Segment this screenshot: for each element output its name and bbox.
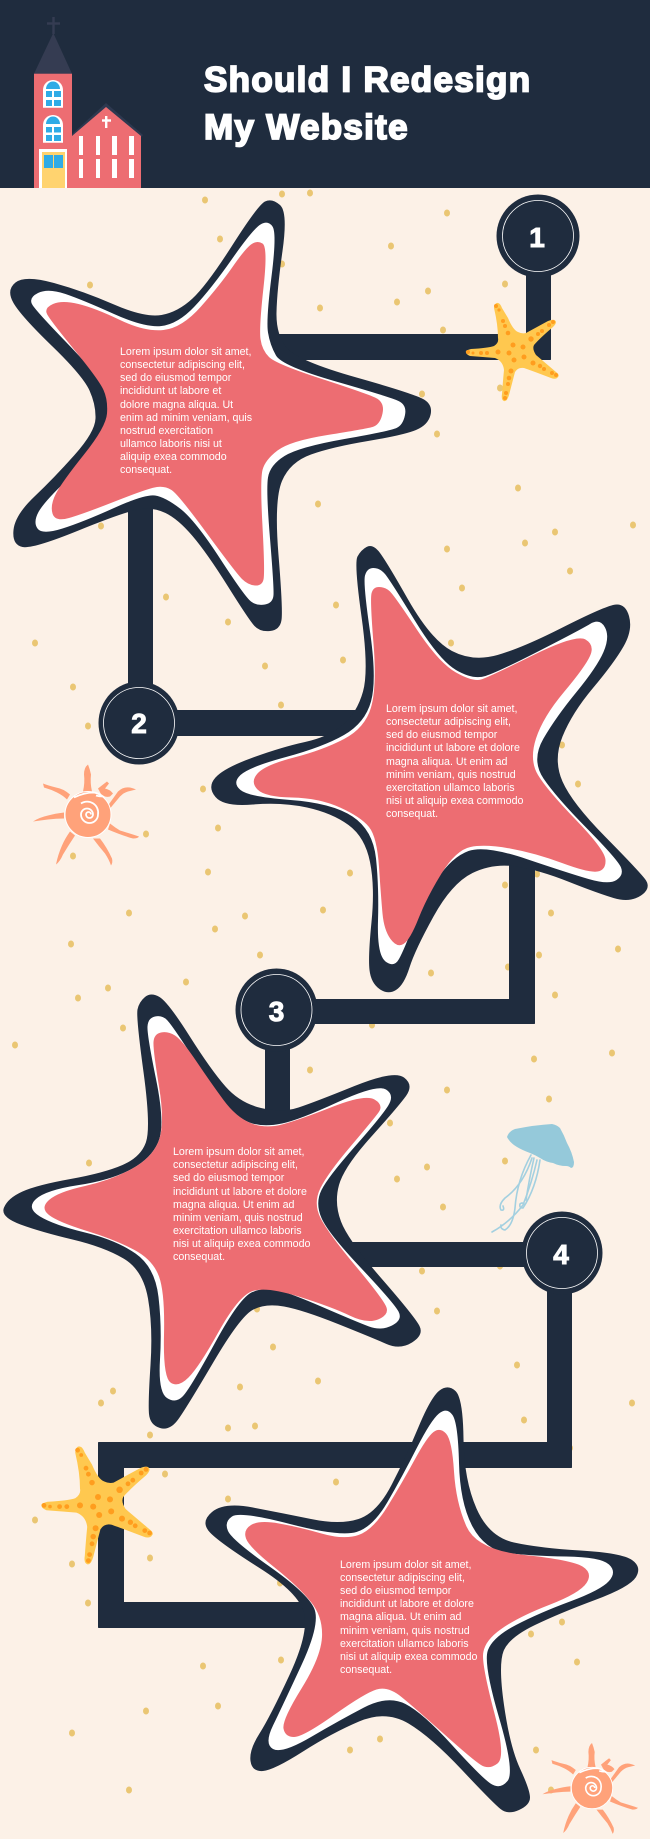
icon: jellyfish xyxy=(492,1124,574,1232)
text block: step 3: consectetur adipiscing elit, xyxy=(173,1159,298,1171)
title: Should I Redesign xyxy=(204,60,531,100)
text block: step 1: consectetur adipiscing elit, xyxy=(120,359,245,371)
text block: step 2: Lorem ipsum dolor sit amet, xyxy=(386,703,517,715)
text block: step 1: consequat. xyxy=(120,464,172,476)
text block: step 4: consequat. xyxy=(340,1664,392,1676)
icon: spiral sun shell bottom right xyxy=(542,1743,638,1834)
icon: church xyxy=(34,17,143,188)
panel: step 1 star xyxy=(10,200,431,631)
text block: step 1: nostrud exercitation xyxy=(120,425,213,437)
header band xyxy=(0,0,650,188)
text block: step 2: incididunt ut labore et dolore xyxy=(386,742,520,754)
text block: step 2: sed do eiusmod tempor xyxy=(386,729,498,741)
text block: step 3: consequat. xyxy=(173,1251,225,1263)
text block: step 3: nisi ut aliquip exea commodo xyxy=(173,1238,310,1250)
badge: number 2 xyxy=(98,682,180,764)
icon: yellow starfish bottom xyxy=(41,1446,153,1564)
title: My Website xyxy=(204,108,409,147)
text block: step 4: exercitation ullamco laboris xyxy=(340,1638,469,1650)
text block: step 1: incididunt ut labore et xyxy=(120,385,221,397)
text block: step 4: minim veniam, quis nostrud xyxy=(340,1625,470,1637)
text block: step 3: minim veniam, quis nostrud xyxy=(173,1212,303,1224)
text block: step 2: exercitation ullamco laboris xyxy=(386,782,515,794)
text block: step 3: sed do eiusmod tempor xyxy=(173,1172,285,1184)
text block: step 2: nisi ut aliquip exea commodo xyxy=(386,795,523,807)
text block: step 1: sed do eiusmod tempor xyxy=(120,372,232,384)
text block: step 4: sed do eiusmod tempor xyxy=(340,1585,452,1597)
panel: step 4 star xyxy=(205,1387,638,1812)
text block: step 4: magna aliqua. Ut enim ad xyxy=(340,1611,462,1623)
badge: number 2: 2 xyxy=(131,708,147,739)
badge: number 1: 1 xyxy=(529,222,545,253)
badge: number 1 xyxy=(496,194,580,278)
panel: step 3 star xyxy=(3,994,421,1429)
text block: step 3: magna aliqua. Ut enim ad xyxy=(173,1199,295,1211)
text block: step 1: dolore magna aliqua. Ut xyxy=(120,399,233,411)
text block: step 2: minim veniam, quis nostrud xyxy=(386,769,516,781)
text block: step 1: ullamco laboris nisi ut xyxy=(120,438,222,450)
text block: step 1: enim ad minim veniam, quis xyxy=(120,412,252,424)
badge: number 3 xyxy=(236,968,318,1052)
badge: number 4: 4 xyxy=(553,1239,569,1270)
text block: step 2: consequat. xyxy=(386,808,438,820)
connector paths xyxy=(98,270,572,1628)
text block: step 2: magna aliqua. Ut enim ad xyxy=(386,756,508,768)
badge: number 4 xyxy=(522,1212,602,1294)
text block: step 2: consectetur adipiscing elit, xyxy=(386,716,511,728)
text block: step 4: nisi ut aliquip exea commodo xyxy=(340,1651,477,1663)
text block: step 4: incididunt ut labore et dolore xyxy=(340,1598,474,1610)
panel: step 2 star xyxy=(211,546,648,992)
text block: step 1: aliquip exea commodo xyxy=(120,451,227,463)
text block: step 4: Lorem ipsum dolor sit amet, xyxy=(340,1559,471,1571)
icon: yellow starfish top xyxy=(466,303,559,401)
text block: step 3: incididunt ut labore et dolore xyxy=(173,1186,307,1198)
text block: step 3: exercitation ullamco laboris xyxy=(173,1225,302,1237)
icon: spiral sun shell left xyxy=(33,764,139,866)
text block: step 1: Lorem ipsum dolor sit amet, xyxy=(120,346,251,358)
badge: number 3: 3 xyxy=(269,996,284,1027)
text block: step 3: Lorem ipsum dolor sit amet, xyxy=(173,1146,304,1158)
text block: step 4: consectetur adipiscing elit, xyxy=(340,1572,465,1584)
